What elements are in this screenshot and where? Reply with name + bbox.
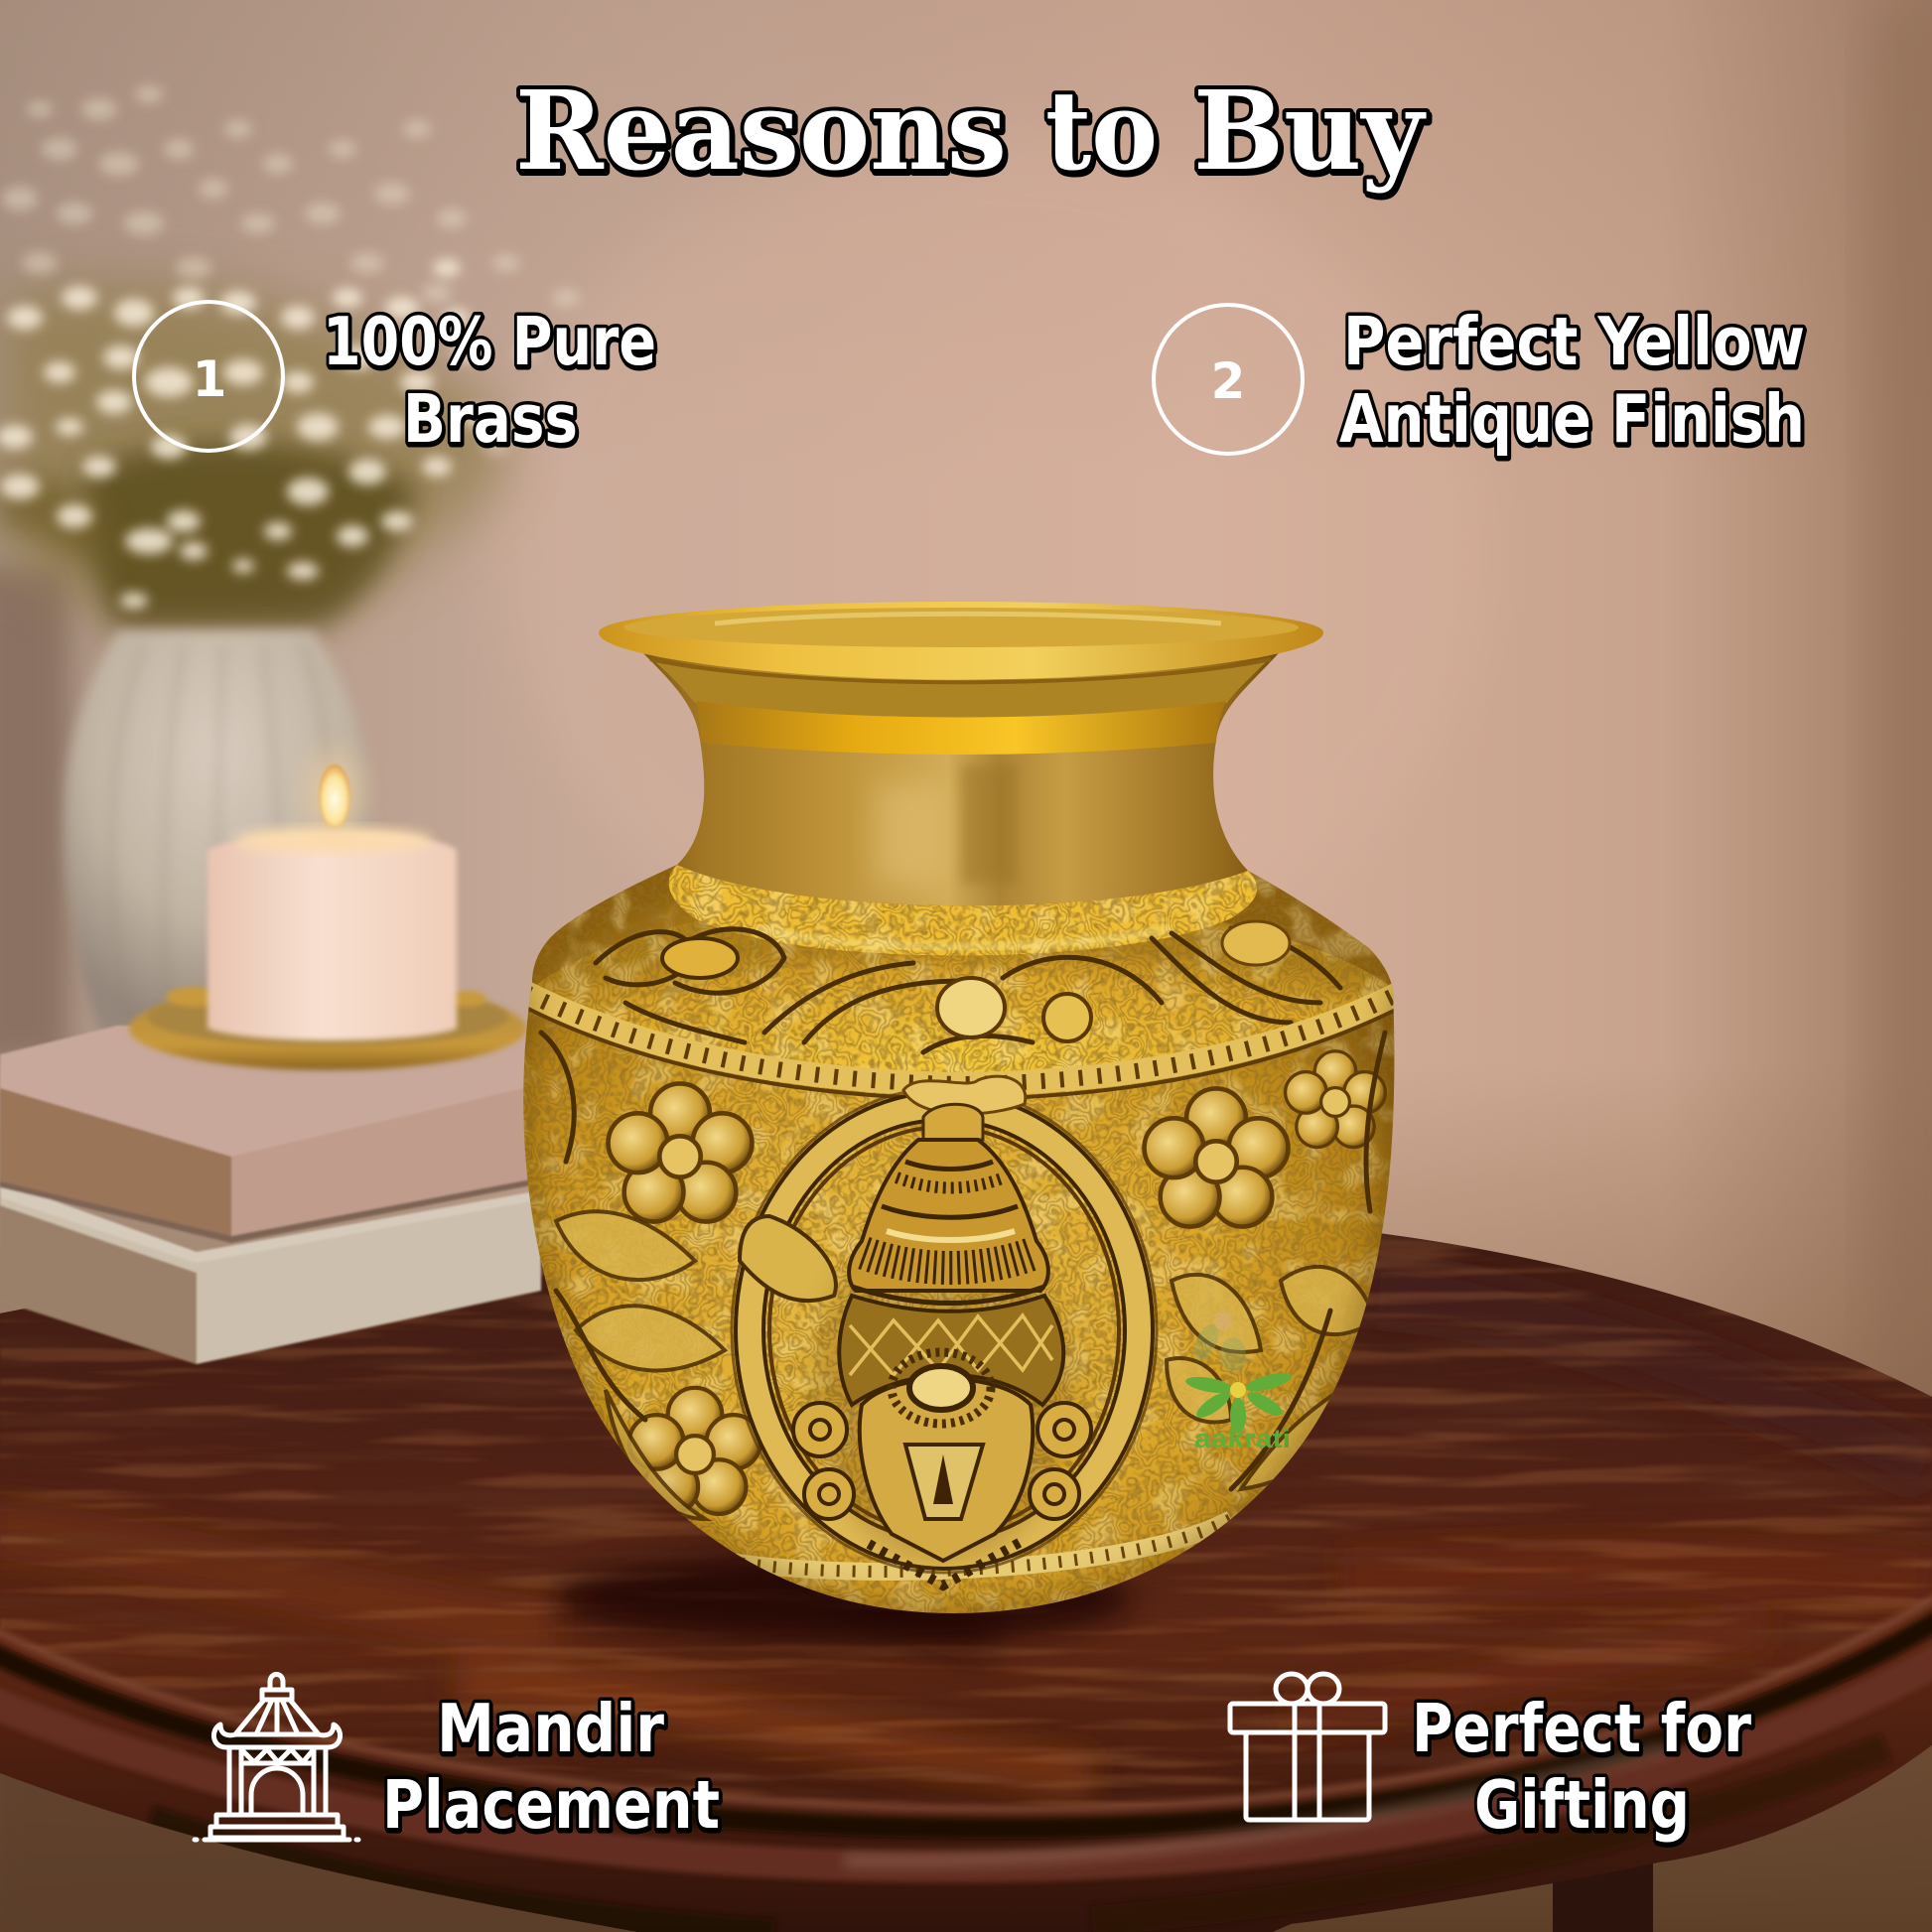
rim lower light band: [0, 1658, 1932, 1866]
watermark: aakrati: [1194, 1424, 1291, 1453]
faint upper blossoms: [2, 85, 608, 455]
icon: temple: [195, 1674, 358, 1840]
rim groove: [0, 1618, 1932, 1829]
feature 4 label: Perfect for: [1412, 1690, 1751, 1767]
feature 3: mandir placement: [195, 1674, 720, 1844]
body edge shading: [518, 983, 1399, 1618]
title: [515, 67, 1427, 195]
feature 2: antique finish: [1154, 303, 1805, 458]
feature 1: pure brass: [134, 302, 656, 458]
lota neck: [635, 645, 1286, 905]
shoulder band: [526, 896, 1400, 1077]
shoulder swirls: [596, 928, 1340, 1052]
feature 2 label: Antique Finish: [1339, 380, 1805, 458]
candle plate: [129, 987, 526, 1070]
number circle 1: [134, 302, 283, 451]
icon: gift box: [1230, 1674, 1385, 1820]
stacked books: [0, 1026, 541, 1364]
rope band: [526, 993, 1400, 1084]
number circle 1: 1: [193, 350, 226, 408]
feature 4 label: [1412, 1690, 1751, 1844]
rim soft highlight: [844, 1747, 1668, 1862]
candle with flame: [207, 753, 457, 1040]
table leg: [1553, 1847, 1653, 1932]
feature 1 label: Brass: [403, 380, 578, 458]
diamond crown: [839, 1296, 1063, 1405]
feature 2 label: [1339, 303, 1805, 458]
number circle 2: 2: [1211, 352, 1245, 410]
feature 2 label: Perfect Yellow: [1343, 303, 1805, 380]
feature 3 label: [382, 1690, 720, 1844]
ribbed ceramic vase: [65, 630, 371, 1033]
watermark: [1184, 1311, 1294, 1453]
crown knot: [903, 1076, 1026, 1114]
lower book: [0, 1181, 541, 1364]
upper book: [0, 1026, 541, 1157]
lota rim and opening: [599, 602, 1323, 682]
pot shadow: [556, 1553, 1132, 1644]
deity face: [793, 1076, 1091, 1586]
lower hatch band: [695, 1519, 1231, 1572]
face: [860, 1379, 1033, 1561]
neck collar: [669, 865, 1257, 955]
crown dome: [849, 1140, 1048, 1291]
medallion ring: [732, 1088, 1157, 1573]
brass lota: [516, 602, 1410, 1628]
feature 3 label: Mandir: [437, 1690, 664, 1767]
flowers: [609, 1083, 752, 1222]
main blossoms: [0, 259, 489, 609]
number circle 2: [1154, 305, 1303, 454]
foliage: [556, 1211, 1380, 1519]
ear ornaments: [793, 1403, 1091, 1519]
title: Buy: [1193, 67, 1427, 195]
title: Reasons: [515, 67, 1007, 195]
round wooden table: [0, 1211, 1932, 1932]
feature 4 label: Gifting: [1474, 1766, 1690, 1844]
feature 1 label: [323, 303, 656, 458]
feature 3 label: Placement: [382, 1766, 720, 1844]
feature 4: gifting: [1230, 1674, 1751, 1844]
dried flowers bouquet: [0, 85, 608, 627]
title: to: [1045, 67, 1158, 195]
rim top edge: [0, 1594, 1932, 1809]
feature 1 label: 100% Pure: [323, 303, 656, 380]
lota body: [516, 864, 1410, 1628]
